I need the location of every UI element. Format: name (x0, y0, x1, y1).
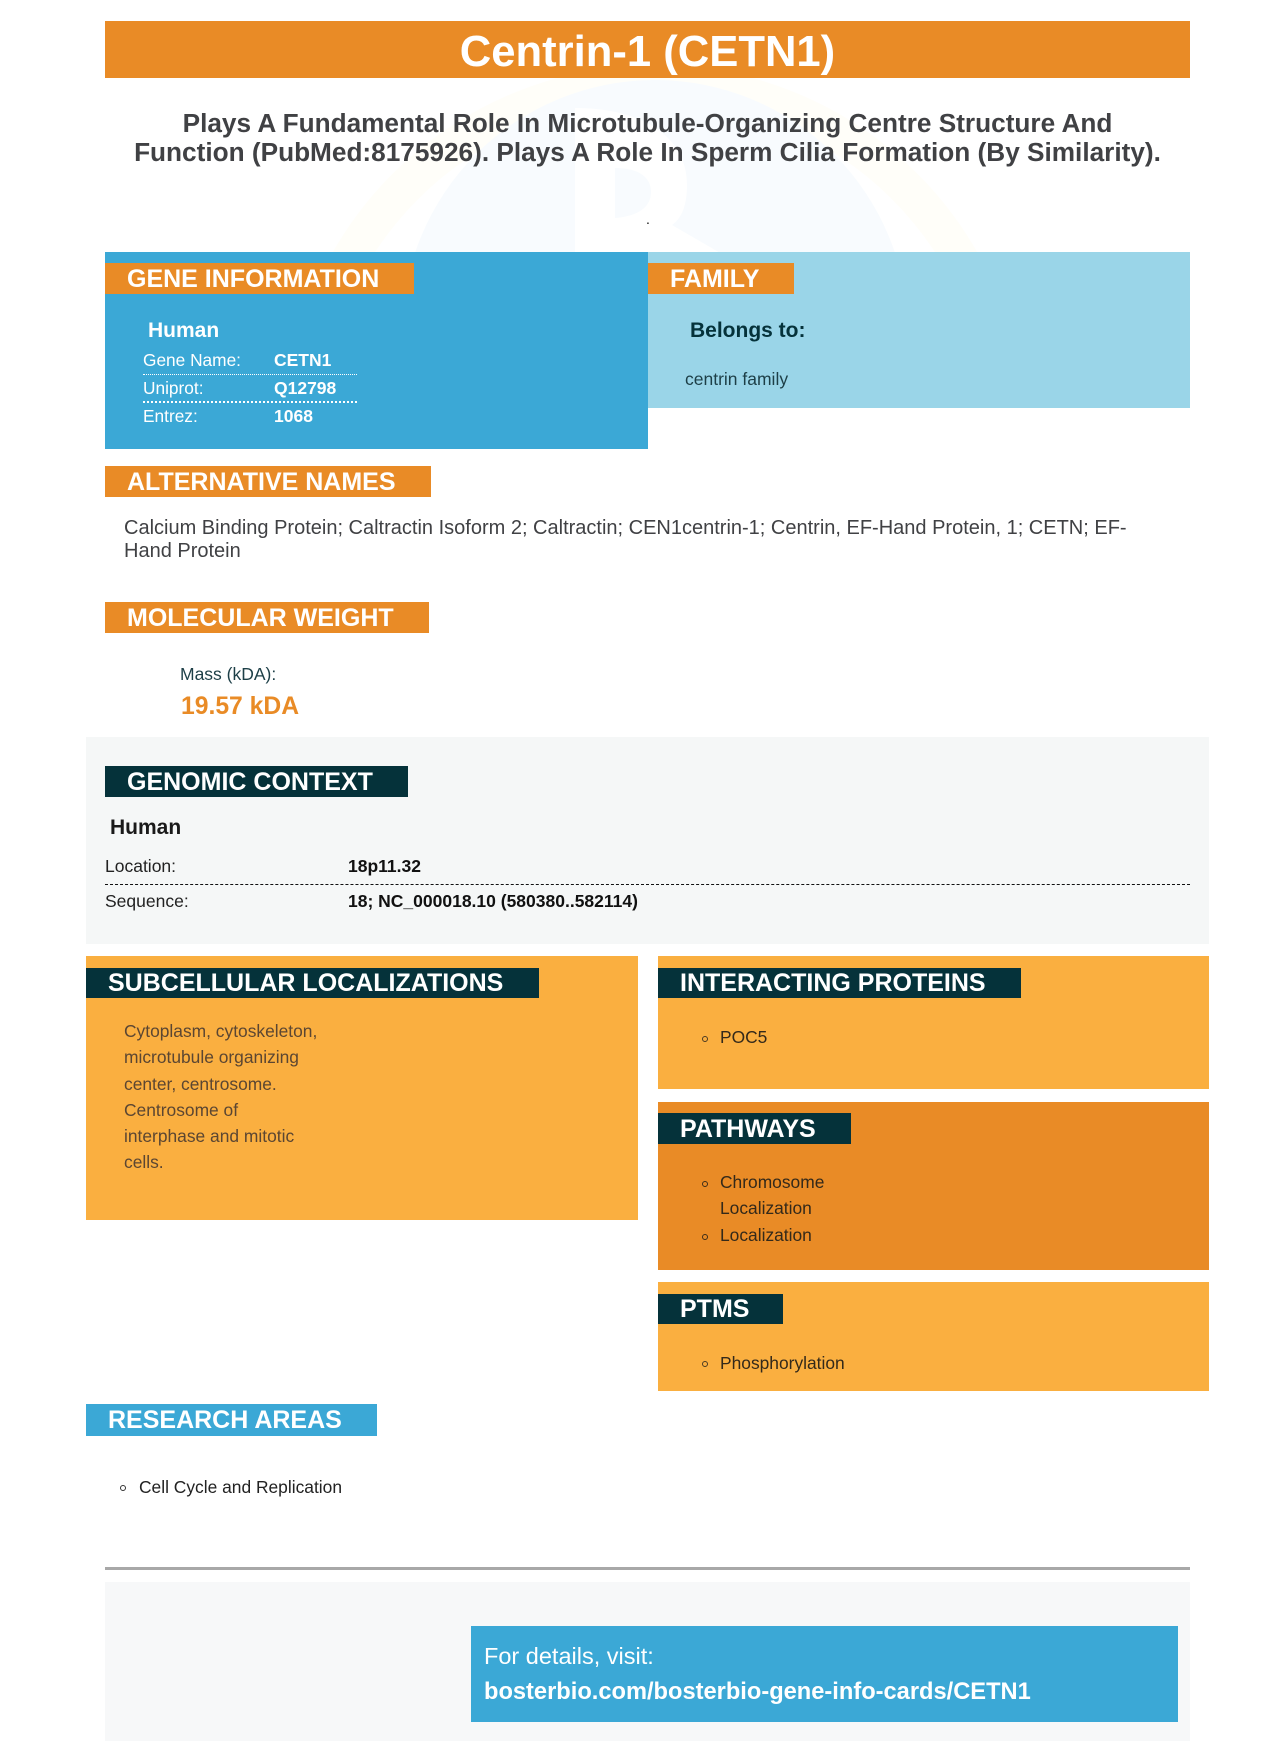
callout url: bosterbio.com/bosterbio-gene-info-cards/CETN1 (484, 1679, 1031, 1705)
species label: Human (110, 816, 181, 839)
mass label: Mass (kDA): (180, 664, 276, 684)
heading: gene information: GENE INFORMATION (127, 265, 379, 293)
panel: gene information (105, 252, 648, 449)
list item bullet (702, 1361, 708, 1367)
list item: Phosphorylation (720, 1353, 845, 1373)
callout label: For details, visit: (484, 1643, 654, 1669)
entrez value: 1068 (274, 406, 313, 426)
heading: subcellular localizations: SUBCELLULAR LOCALIZATIONS (108, 969, 503, 997)
gene name label: Gene Name: (143, 350, 241, 370)
location value: 18p11.32 (348, 856, 421, 876)
subtitle description: Plays A Fundamental Role In Microtubule-Organizing Centre Structure And (183, 108, 1112, 138)
subtitle description: Function (PubMed:8175926). Plays A Role In Sperm Cilia Formation (By Similarity). (134, 137, 1161, 167)
sequence label: Sequence: (105, 891, 189, 911)
belongs to label: Belongs to: (690, 319, 806, 342)
list item: Localization (720, 1225, 812, 1245)
entrez label: Entrez: (143, 406, 198, 426)
research area item: Cell Cycle and Replication (139, 1477, 342, 1497)
panel: genomic context (86, 737, 1209, 944)
list item: Chromosome (720, 1172, 824, 1192)
list item bullet (702, 1036, 708, 1042)
uniprot value: Q12798 (274, 378, 336, 398)
panel: subcellular localizations (86, 956, 638, 1220)
panel: family (648, 252, 1190, 408)
list item: Localization (720, 1198, 812, 1218)
heading: ptms (658, 1294, 783, 1324)
localization text (124, 1021, 317, 1172)
alternative names text (124, 517, 1127, 562)
panel: footer (105, 1582, 1190, 1741)
localization text: center, centrosome. (124, 1074, 277, 1094)
background watermark logo (0, 0, 1288, 260)
heading: alternative names: ALTERNATIVE NAMES (127, 468, 396, 496)
heading: family (648, 263, 794, 294)
small dot: . (646, 211, 650, 227)
heading: genomic context: GENOMIC CONTEXT (127, 768, 373, 796)
subtitle description (134, 108, 1161, 167)
title text: Centrin-1 (CETN1) (460, 28, 835, 76)
callout: details link (471, 1626, 1178, 1722)
alternative names text: Calcium Binding Protein; Caltractin Isoform 2; Caltractin; CEN1centrin-1; Centrin, EF-Hand Protein, 1; CETN; EF- (124, 517, 1127, 539)
list item bullet (702, 1234, 708, 1240)
localization text: Centrosome of (124, 1100, 238, 1120)
localization text: cells. (124, 1152, 164, 1172)
heading: ptms: PTMS (680, 1295, 749, 1323)
sequence value: 18; NC_000018.10 (580380..582114) (348, 891, 638, 911)
location label: Location: (105, 856, 176, 876)
heading: pathways: PATHWAYS (680, 1115, 816, 1143)
heading: family: FAMILY (670, 265, 759, 293)
localization text: microtubule organizing (124, 1047, 299, 1067)
panel: ptms (658, 1282, 1209, 1391)
list item: POC5 (720, 1027, 767, 1047)
alternative names text: Hand Protein (124, 540, 241, 562)
title banner (105, 21, 1190, 78)
list item bullet (702, 1181, 708, 1187)
family value: centrin family (685, 369, 788, 389)
panel: interacting proteins (658, 956, 1209, 1089)
uniprot label: Uniprot: (143, 378, 204, 398)
localization text: interphase and mitotic (124, 1126, 294, 1146)
heading: research areas: RESEARCH AREAS (108, 1406, 342, 1434)
localization text: Cytoplasm, cytoskeleton, (124, 1021, 317, 1041)
heading: interacting proteins: INTERACTING PROTEINS (680, 969, 986, 997)
species label: Human (148, 319, 219, 342)
mass value: 19.57 kDA (181, 693, 299, 720)
list item bullet (120, 1485, 126, 1491)
list item (720, 1172, 824, 1218)
heading: molecular weight: MOLECULAR WEIGHT (127, 604, 394, 632)
gene name value: CETN1 (274, 350, 331, 370)
heading: pathways (658, 1113, 851, 1144)
panel: pathways (658, 1102, 1209, 1270)
